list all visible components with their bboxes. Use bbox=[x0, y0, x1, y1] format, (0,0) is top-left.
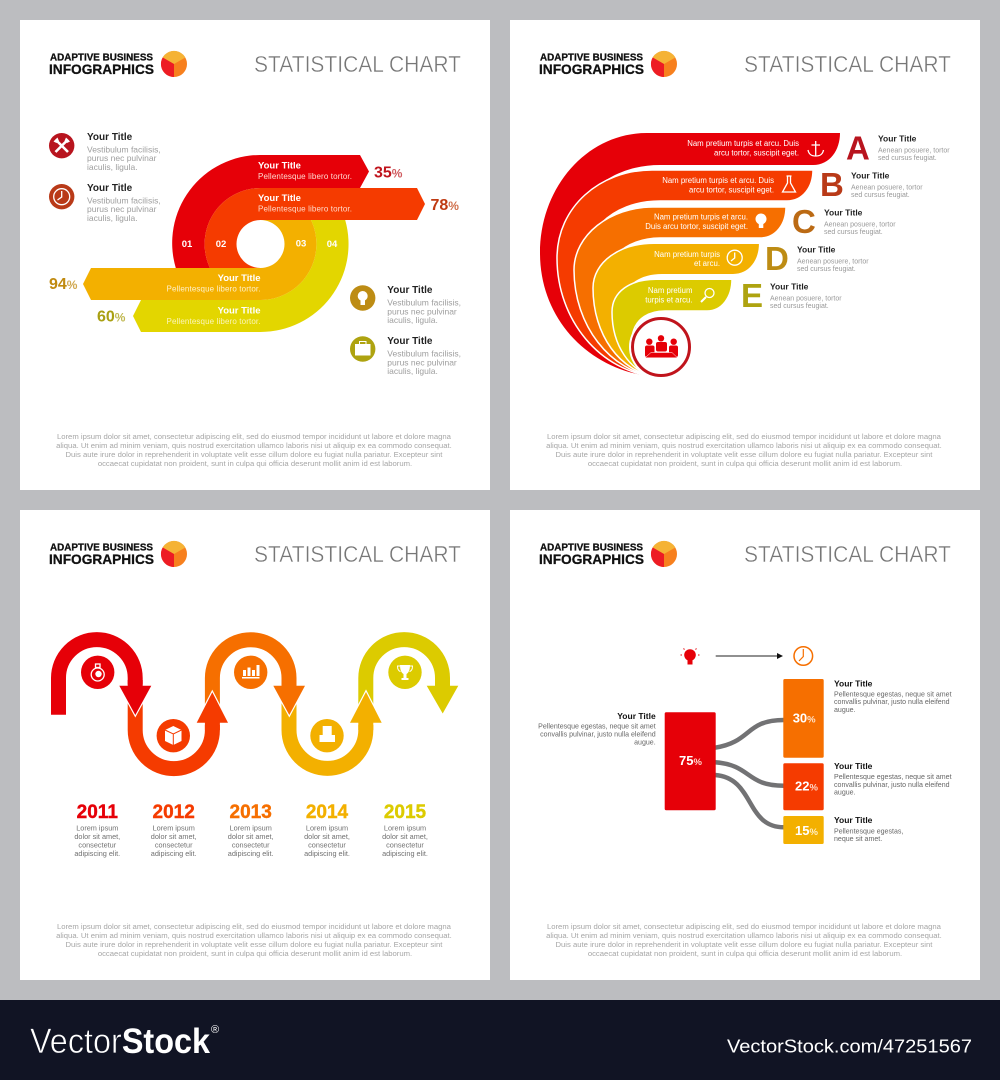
percent values bbox=[49, 164, 459, 326]
band text bbox=[645, 139, 799, 304]
band text: Nam pretium turpis et arcu. Duis bbox=[662, 176, 774, 185]
year descriptions: consectetur bbox=[308, 840, 346, 850]
ring numbers: 03 bbox=[296, 238, 306, 250]
flow descriptions: convallis pulvinar, justo nulla eleifend bbox=[540, 732, 656, 738]
brand wordmark: VectorStock bbox=[30, 1022, 210, 1061]
legend item: clock bbox=[49, 183, 161, 223]
letter descriptions: Aenean posuere, tortor bbox=[770, 296, 842, 302]
year labels: 2015 bbox=[384, 802, 427, 823]
flow descriptions: Pellentesque egestas, neque sit amet bbox=[834, 691, 952, 698]
bar values: 22% bbox=[795, 778, 818, 793]
icon: podium bbox=[310, 719, 344, 752]
band labels: Pellentesque libero tortor. bbox=[166, 317, 260, 326]
flow descriptions: Your Title bbox=[617, 711, 656, 721]
panel: flow chart bbox=[510, 510, 980, 980]
legend item: tools: Vestibulum facilisis, bbox=[87, 144, 161, 154]
curved band D bbox=[593, 243, 760, 377]
legend item: bulb: purus nec pulvinar bbox=[387, 306, 457, 316]
year descriptions: adipiscing elit. bbox=[228, 849, 274, 858]
year descriptions: dolor sit amet, bbox=[382, 832, 428, 841]
panel 1 brand logo bbox=[49, 51, 187, 77]
year descriptions: Lorem ipsum bbox=[384, 824, 426, 833]
flow descriptions: Your Title bbox=[834, 761, 873, 771]
year descriptions: adipiscing elit. bbox=[382, 849, 428, 858]
flow descriptions: Pellentesque egestas, neque sit amet bbox=[834, 774, 952, 781]
ring numbers: 04 bbox=[327, 239, 338, 250]
panel 2 brand logo: INFOGRAPHICS bbox=[539, 61, 644, 77]
year descriptions: dolor sit amet, bbox=[228, 832, 274, 841]
icon: magnifier bbox=[701, 288, 714, 302]
bar values bbox=[679, 711, 818, 838]
band labels bbox=[166, 160, 352, 326]
panel 4 brand logo: ADAPTIVE BUSINESS bbox=[540, 542, 643, 554]
percent values: 94% bbox=[49, 276, 78, 293]
band labels: Your Title bbox=[258, 160, 301, 172]
arrow 2011 bbox=[58, 640, 151, 715]
bar values: 75% bbox=[679, 753, 702, 768]
year labels: 2011 bbox=[77, 802, 118, 823]
flow descriptions: neque sit amet. bbox=[834, 836, 882, 843]
bar values: 30% bbox=[793, 711, 816, 726]
letter descriptions: Your Title bbox=[770, 282, 809, 292]
band text: arcu tortor, suscipit eget. bbox=[689, 186, 774, 194]
letters A to E: A bbox=[846, 130, 870, 166]
band labels: Pellentesque libero tortor. bbox=[166, 284, 260, 294]
bar 15% bbox=[783, 816, 824, 844]
curved band E bbox=[612, 279, 732, 377]
legend item: clock: Your Title bbox=[87, 183, 133, 194]
letters A to E: D bbox=[765, 240, 789, 277]
year descriptions: consectetur bbox=[155, 840, 193, 850]
flow descriptions: Pellentesque egestas, bbox=[834, 828, 903, 835]
panel 3 brand logo: ADAPTIVE BUSINESS bbox=[50, 542, 153, 554]
letter descriptions: Your Title bbox=[824, 208, 863, 218]
year descriptions: Lorem ipsum bbox=[230, 824, 272, 833]
icon: trophy bbox=[388, 656, 422, 689]
panel 3 brand logo bbox=[49, 541, 187, 567]
panel 1 brand logo: ADAPTIVE BUSINESS bbox=[50, 52, 153, 64]
legend item: bulb bbox=[350, 285, 461, 325]
band labels: Your Title bbox=[218, 273, 260, 284]
legend item: tools: purus nec pulvinar bbox=[87, 153, 157, 163]
legend item: briefcase: Your Title bbox=[387, 336, 433, 347]
icon: box bbox=[157, 719, 190, 752]
ring: orange band bbox=[205, 188, 425, 268]
curved band A bbox=[540, 133, 840, 377]
letter descriptions bbox=[770, 134, 950, 310]
panel 1 heading: STATISTICAL CHART bbox=[254, 51, 461, 77]
arrow 2015 bbox=[366, 640, 458, 714]
percent values: 35% bbox=[374, 164, 403, 182]
icon: clock bbox=[727, 250, 742, 265]
panel 4 brand logo bbox=[539, 541, 677, 567]
arrow 2012 bbox=[135, 692, 228, 769]
bar values: 15% bbox=[795, 823, 818, 838]
legend item: clock: purus nec pulvinar bbox=[87, 204, 157, 214]
year labels: 2013 bbox=[230, 802, 272, 823]
arrow 2014 bbox=[289, 692, 382, 768]
letter descriptions: Aenean posuere, tortor bbox=[851, 184, 923, 192]
band labels: Pellentesque libero tortor. bbox=[258, 204, 352, 214]
bar 75% bbox=[665, 712, 716, 810]
flow descriptions: augue. bbox=[634, 740, 656, 746]
band text: Nam pretium turpis bbox=[654, 250, 720, 259]
year descriptions: consectetur bbox=[386, 840, 424, 850]
legend item: clock: Vestibulum facilisis, bbox=[87, 196, 161, 206]
year descriptions: dolor sit amet, bbox=[304, 832, 350, 841]
footer banner bbox=[0, 1000, 1000, 1080]
panel 3 footer text: aliqua. Ut enim ad minim veniam, quis nostrud exercitation ullamco laboris nisi ut aliquip ex ea commodo consequat. bbox=[56, 931, 452, 940]
legend item: bulb: Vestibulum facilisis, bbox=[387, 298, 461, 308]
panel 1 brand logo: INFOGRAPHICS bbox=[49, 61, 154, 77]
band text: Nam pretium turpis et arcu. bbox=[654, 212, 748, 222]
bar 22% bbox=[783, 763, 824, 810]
panel 3 heading: STATISTICAL CHART bbox=[254, 541, 461, 567]
flow descriptions: augue. bbox=[834, 707, 856, 714]
letter descriptions: sed cursus feugiat. bbox=[851, 192, 910, 199]
icon: bulb bbox=[756, 214, 766, 228]
panel: curved list bbox=[510, 20, 980, 490]
registered mark: ® bbox=[211, 1024, 219, 1036]
legend item: tools: iaculis, ligula. bbox=[87, 162, 138, 172]
flow descriptions: convallis pulvinar, justo nulla eleifend bbox=[834, 699, 950, 706]
year descriptions: adipiscing elit. bbox=[304, 849, 350, 858]
panel 3 brand logo: INFOGRAPHICS bbox=[49, 551, 154, 567]
year descriptions: adipiscing elit. bbox=[151, 849, 197, 858]
year descriptions: dolor sit amet, bbox=[74, 832, 120, 841]
ring: yellow band bbox=[133, 220, 349, 332]
panel: timeline bbox=[20, 510, 490, 980]
arrow between icons bbox=[716, 653, 783, 659]
panel: ring chart bbox=[20, 20, 490, 490]
letter descriptions: sed cursus feugiat. bbox=[878, 155, 937, 162]
legend item: tools: Your Title bbox=[87, 132, 133, 143]
legend item: tools bbox=[49, 132, 161, 172]
letter descriptions: sed cursus feugiat. bbox=[797, 266, 856, 273]
band labels: Your Title bbox=[258, 193, 301, 204]
panel 2 heading: STATISTICAL CHART bbox=[744, 51, 951, 77]
ring numbers: 02 bbox=[216, 239, 226, 250]
year descriptions: Lorem ipsum bbox=[153, 824, 195, 833]
letters A to E: B bbox=[820, 166, 844, 203]
panel 1 footer text: Lorem ipsum dolor sit amet, consectetur adipiscing elit, sed do eiusmod tempor incididunt ut labore et dolore magna bbox=[57, 432, 452, 441]
flow links bbox=[715, 720, 784, 827]
panel 1 footer text: Duis aute irure dolor in reprehenderit in voluptate velit esse cillum dolore eu fugiat nulla pariatur. Excepteur sint bbox=[65, 450, 443, 459]
letters A to E: E bbox=[741, 277, 763, 314]
icon: flask bbox=[782, 176, 796, 192]
panel 4 footer text: Lorem ipsum dolor sit amet, consectetur adipiscing elit, sed do eiusmod tempor incididunt ut labore et dolore magna bbox=[547, 922, 942, 931]
panel 2 footer text: Duis aute irure dolor in reprehenderit in voluptate velit esse cillum dolore eu fugiat nulla pariatur. Excepteur sint bbox=[555, 450, 933, 459]
icon: anchor bbox=[808, 141, 824, 156]
icon: red bulb bbox=[680, 648, 700, 664]
panel 2 brand logo: ADAPTIVE BUSINESS bbox=[540, 52, 643, 64]
arrow 2013 bbox=[212, 640, 305, 715]
panel 4 footer text: occaecat cupidatat non proident, sunt in culpa qui officia deserunt mollit anim id est laborum. bbox=[588, 949, 902, 958]
bar 30% bbox=[783, 679, 824, 758]
percent values: 78% bbox=[430, 197, 459, 214]
panel 1 footer text: aliqua. Ut enim ad minim veniam, quis nostrud exercitation ullamco laboris nisi ut aliquip ex ea commodo consequat. bbox=[56, 441, 452, 450]
legend item: briefcase bbox=[350, 336, 461, 376]
year descriptions: Lorem ipsum bbox=[76, 824, 118, 833]
curved band B bbox=[557, 170, 813, 377]
year descriptions: Lorem ipsum bbox=[306, 824, 348, 833]
panel 4 footer text: Duis aute irure dolor in reprehenderit in voluptate velit esse cillum dolore eu fugiat nulla pariatur. Excepteur sint bbox=[555, 940, 933, 949]
panel 2 brand logo bbox=[539, 51, 677, 77]
curved band C bbox=[574, 207, 786, 377]
panel 2 footer text: occaecat cupidatat non proident, sunt in culpa qui officia deserunt mollit anim id est laborum. bbox=[588, 459, 902, 468]
legend item: briefcase: iaculis, ligula. bbox=[387, 366, 438, 376]
flow descriptions: Pellentesque egestas, neque sit amet bbox=[538, 724, 656, 731]
panel 3 footer text: Lorem ipsum dolor sit amet, consectetur adipiscing elit, sed do eiusmod tempor incididunt ut labore et dolore magna bbox=[57, 922, 452, 931]
year descriptions: dolor sit amet, bbox=[151, 832, 197, 841]
ring: red band bbox=[172, 155, 369, 268]
year descriptions bbox=[74, 824, 428, 858]
band text: Nam pretium turpis et arcu. Duis bbox=[687, 139, 799, 148]
legend item: bulb: Your Title bbox=[387, 285, 433, 296]
letter descriptions: Your Title bbox=[878, 134, 917, 144]
panel 2 footer text: aliqua. Ut enim ad minim veniam, quis nostrud exercitation ullamco laboris nisi ut aliquip ex ea commodo consequat. bbox=[546, 441, 942, 450]
band labels: Pellentesque libero tortor. bbox=[258, 172, 352, 181]
letters A to E bbox=[741, 130, 870, 314]
ring numbers: 01 bbox=[182, 239, 193, 250]
panel 3 footer text: Duis aute irure dolor in reprehenderit in voluptate velit esse cillum dolore eu fugiat nulla pariatur. Excepteur sint bbox=[65, 940, 443, 949]
year descriptions: consectetur bbox=[232, 840, 270, 850]
year descriptions: consectetur bbox=[78, 840, 117, 850]
flow descriptions: Your Title bbox=[834, 678, 873, 688]
ring numbers bbox=[182, 238, 338, 250]
letter descriptions: Your Title bbox=[851, 170, 890, 180]
letter descriptions: Aenean posuere, tortor bbox=[878, 148, 950, 154]
icon: stopwatch bbox=[81, 656, 114, 689]
people icon in ring bbox=[629, 315, 693, 379]
ring: amber band bbox=[83, 220, 316, 300]
panel 3 footer text: occaecat cupidatat non proident, sunt in culpa qui officia deserunt mollit anim id est laborum. bbox=[98, 949, 412, 958]
icon: bars bbox=[234, 656, 267, 689]
letter descriptions: Aenean posuere, tortor bbox=[797, 258, 869, 266]
legend item: clock: iaculis, ligula. bbox=[87, 213, 138, 223]
panel 4 footer text: aliqua. Ut enim ad minim veniam, quis nostrud exercitation ullamco laboris nisi ut aliquip ex ea commodo consequat. bbox=[546, 931, 942, 940]
flow descriptions: convallis pulvinar, justo nulla eleifend bbox=[834, 782, 950, 789]
band text: Nam pretium bbox=[648, 286, 692, 295]
panel 4 heading: STATISTICAL CHART bbox=[744, 541, 951, 567]
legend item: bulb: iaculis, ligula. bbox=[387, 315, 438, 325]
panel 4 brand logo: INFOGRAPHICS bbox=[539, 551, 644, 567]
letter descriptions: Aenean posuere, tortor bbox=[824, 222, 896, 228]
year labels: 2014 bbox=[306, 802, 349, 823]
flow descriptions bbox=[538, 678, 952, 843]
letter descriptions: sed cursus feugiat. bbox=[824, 229, 883, 236]
band labels: Your Title bbox=[218, 306, 260, 316]
panel 1 footer text: occaecat cupidatat non proident, sunt in culpa qui officia deserunt mollit anim id est laborum. bbox=[98, 459, 412, 468]
icon: orange clock bbox=[794, 647, 813, 665]
panel 2 footer text: Lorem ipsum dolor sit amet, consectetur adipiscing elit, sed do eiusmod tempor incididunt ut labore et dolore magna bbox=[547, 432, 942, 441]
legend item: briefcase: Vestibulum facilisis, bbox=[387, 348, 461, 358]
letter descriptions: Your Title bbox=[797, 244, 836, 254]
year descriptions: adipiscing elit. bbox=[74, 849, 120, 858]
flow descriptions: Your Title bbox=[834, 815, 873, 825]
flow descriptions: augue. bbox=[834, 790, 856, 797]
year labels: 2012 bbox=[153, 802, 195, 823]
letters A to E: C bbox=[792, 203, 816, 240]
legend item: briefcase: purus nec pulvinar bbox=[387, 358, 457, 368]
band text: Duis arcu tortor, suscipit eget. bbox=[645, 222, 748, 231]
percent values: 60% bbox=[97, 308, 126, 326]
band text: et arcu. bbox=[694, 259, 720, 268]
letter descriptions: sed cursus feugiat. bbox=[770, 303, 829, 310]
year labels bbox=[77, 802, 427, 823]
image reference: VectorStock.com/47251567 bbox=[727, 1036, 972, 1057]
band text: turpis et arcu. bbox=[645, 296, 692, 304]
band text: arcu tortor, suscipit eget. bbox=[714, 148, 799, 158]
